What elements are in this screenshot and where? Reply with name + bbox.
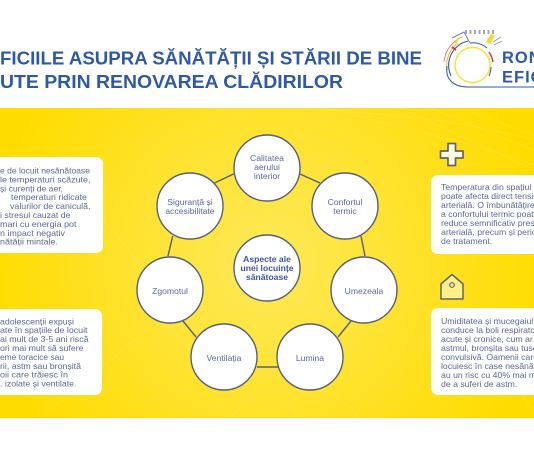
panel: right top card: Temperatura din spațiul	[441, 182, 531, 192]
panel: right top card: de tratament.	[441, 236, 492, 246]
node: safety: accesibilitate	[165, 206, 215, 216]
panel: left bottom card: ate în spațiile de locuit	[0, 325, 88, 335]
node: humidity	[331, 257, 397, 323]
node: ventilation: Ventilația	[207, 353, 242, 363]
center node: Aspecte ale	[243, 254, 291, 264]
connector ring	[168, 174, 365, 367]
panel: left bottom card	[0, 309, 102, 395]
icon: plus	[440, 144, 463, 166]
panel: left top card: mari cu energia pot	[0, 219, 77, 229]
title: FICIILE ASUPRA SĂNĂTĂȚII ȘI STĂRII DE BINE	[0, 48, 422, 68]
node: thermal comfort	[312, 173, 378, 239]
center node: sănătoase	[246, 272, 288, 282]
panel: right bottom card: Umiditatea și mucegaiul	[441, 316, 533, 326]
node: thermal comfort: Confortul	[328, 197, 363, 207]
title: UTE PRIN RENOVAREA CLĂDIRILOR	[0, 71, 343, 92]
logo	[444, 32, 534, 87]
panel: left top card: și curenți de aer,	[0, 183, 63, 193]
node: light: Lumina	[296, 353, 324, 363]
center node: unei locuințe	[240, 263, 294, 273]
panel: left bottom card: . izolate și ventilate.	[0, 379, 76, 389]
yellow panel	[0, 108, 534, 418]
node: ventilation	[191, 324, 257, 390]
panel: right bottom card: de a suferi de astm.	[441, 379, 517, 389]
node: humidity: Umezeala	[345, 286, 384, 296]
panel: left bottom card: adolescenții expuși	[0, 316, 74, 326]
panel: left bottom card: ori mai mult să sufere	[0, 343, 84, 353]
panel: left top card	[0, 157, 103, 253]
node: thermal comfort: termic	[333, 206, 357, 216]
node: noise	[137, 257, 203, 323]
panel: right top card	[431, 175, 534, 254]
panel: left top card: e de locuit nesănătoase	[0, 166, 90, 176]
panel: left top card: valurilor de caniculă,	[10, 201, 90, 211]
panel: left bottom card: eme toracice sau	[0, 352, 64, 362]
node: air quality: interior	[254, 171, 280, 181]
panel: right bottom card	[431, 308, 534, 395]
node: air quality	[234, 135, 300, 201]
panel: left bottom card: ai mult de 3-5 ani riscă	[0, 334, 89, 344]
panel: left top card: nătății mintale.	[0, 237, 58, 247]
panel: left top card: le temperaturi scăzute,	[0, 174, 90, 184]
node: light	[277, 324, 343, 390]
panel: left top card: n impact negativ	[0, 228, 66, 238]
panel: right top card: arterială. O îmbunătățire	[441, 200, 534, 210]
node: air quality: aerului	[254, 162, 280, 172]
panel: left bottom card: oii care trăiesc în	[0, 370, 68, 380]
icon: house	[441, 274, 463, 299]
panel: left top card: i stresul cauzat de	[0, 210, 71, 220]
node: safety	[157, 173, 223, 239]
node: safety: Siguranță și	[167, 197, 213, 207]
center node	[234, 235, 300, 301]
panel: left bottom card: rii, astm sau bronșită	[0, 361, 81, 371]
panel: left top card: temperaturi ridicate	[11, 192, 87, 202]
title	[0, 48, 422, 92]
node: noise: Zgomotul	[152, 286, 188, 296]
node: air quality: Calitatea	[250, 153, 284, 163]
